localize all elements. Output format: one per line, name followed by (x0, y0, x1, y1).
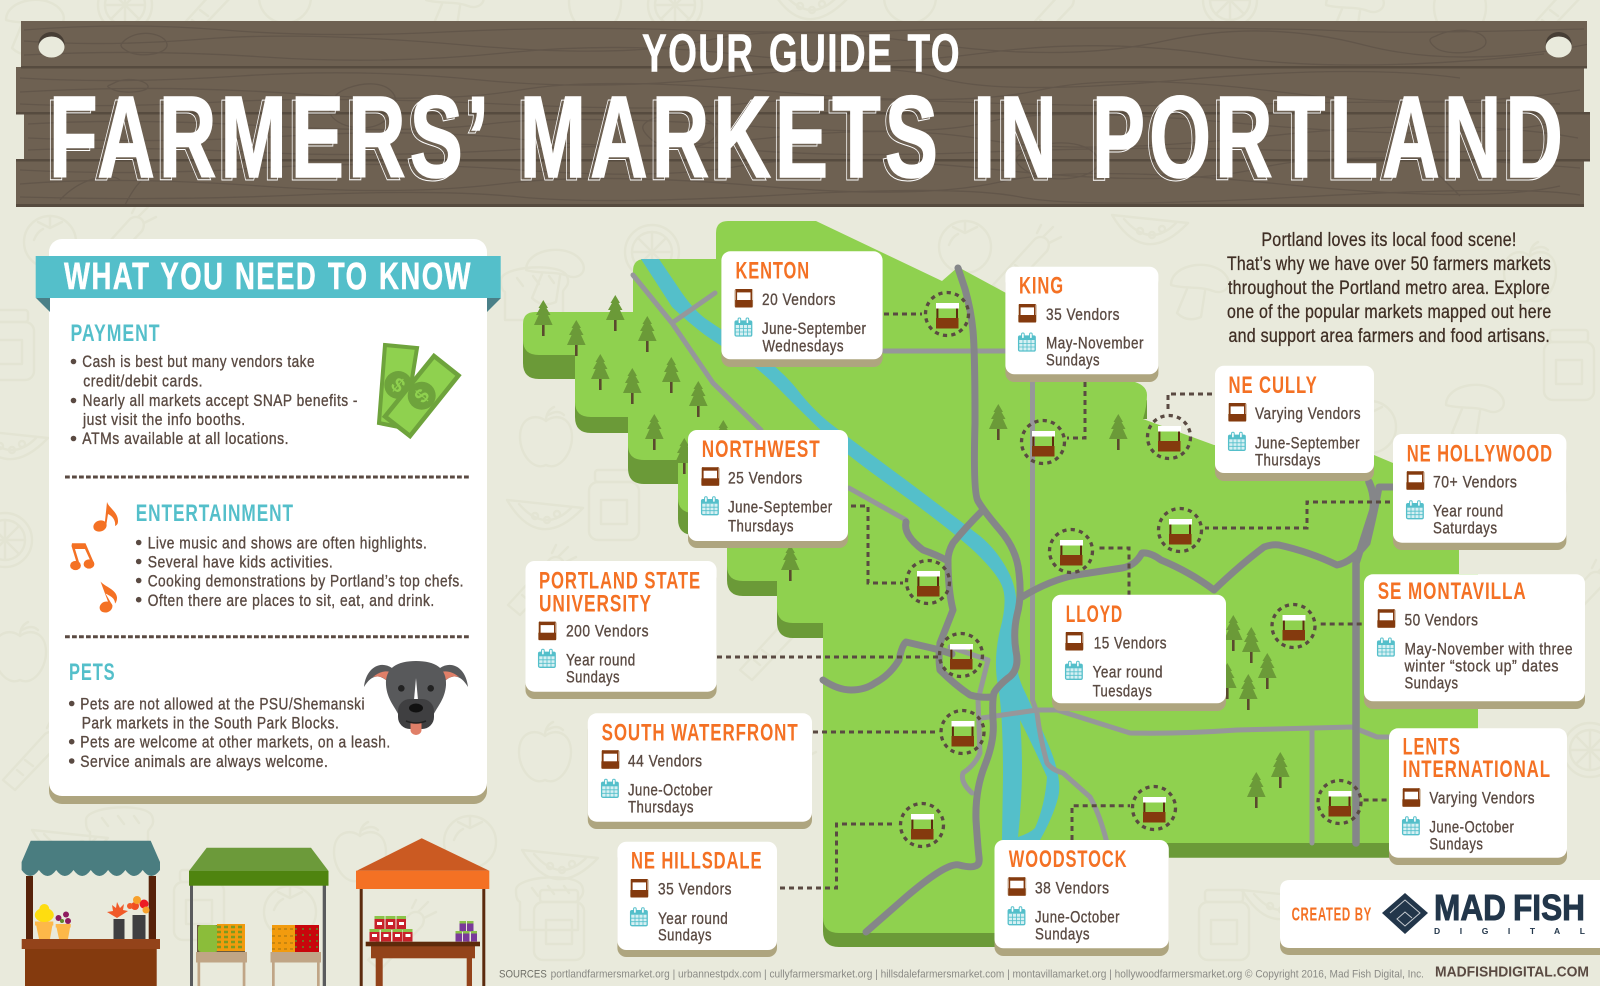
card: Lents International (1389, 728, 1567, 865)
payment bullets (71, 353, 358, 448)
vendor count (1065, 632, 1167, 652)
dotted connectors (717, 314, 1390, 888)
vendor count: Varying Vendors (1255, 404, 1361, 423)
card: Woodstock (994, 840, 1169, 956)
trees (534, 295, 1290, 808)
schedule: June-September (762, 319, 866, 338)
card: South Waterfront (588, 713, 812, 829)
schedule: Thursdays (1255, 450, 1321, 469)
market name: SOUTH WATERFRONT (602, 720, 799, 747)
vendor count: 200 Vendors (566, 622, 649, 641)
ribbon banner (36, 256, 501, 312)
schedule (539, 649, 636, 686)
schedule (1019, 333, 1144, 370)
schedule: Year round (566, 650, 636, 669)
pets bullets: Park markets in the South Park Blocks. (82, 715, 339, 733)
schedule: June-October (628, 780, 713, 799)
vendor count: 70+ Vendors (1433, 472, 1517, 491)
card: NE Cully (1215, 366, 1374, 481)
market name (539, 567, 701, 617)
map edge shadow (523, 330, 1392, 947)
section heading: pets: PETS (69, 659, 116, 686)
map land (523, 221, 1478, 933)
card: NE Hillsdale (617, 842, 777, 957)
vendor count: 50 Vendors (1404, 610, 1478, 629)
schedule: Sundays (1404, 673, 1458, 692)
flower pots (35, 896, 149, 939)
card: NE Hollywood (1393, 434, 1566, 550)
vendor count: 44 Vendors (628, 751, 702, 770)
wooden sign header (16, 21, 1600, 207)
market name: PORTLAND STATE (539, 567, 701, 594)
schedule (602, 779, 713, 816)
schedule: winter “stock up” dates (1404, 656, 1559, 675)
ribbon banner: WHAT YOU NEED TO KNOW (64, 256, 472, 298)
schedule (1008, 907, 1120, 943)
entertainment bullets: Several have kids activities. (148, 553, 333, 571)
card: Northwest (688, 430, 848, 548)
schedule: May-November (1046, 334, 1144, 353)
market stall: flowers (22, 841, 160, 986)
title: your guide to: YOUR GUIDE TO (642, 24, 961, 84)
website: MADFISHDIGITAL.COM (1435, 965, 1589, 981)
schedule: June-October (1035, 908, 1120, 927)
portland map (523, 221, 1478, 947)
schedule: Year round (1093, 662, 1163, 681)
market name: SE MONTAVILLA (1378, 578, 1527, 605)
section heading: payment: PAYMENT (70, 320, 160, 347)
schedule: Year round (658, 909, 728, 928)
payment bullets: ATMs available at all locations. (82, 430, 289, 448)
schedule (1407, 501, 1504, 537)
vendor count (1377, 609, 1478, 629)
card: Lloyd (1052, 595, 1226, 711)
produce crates (196, 924, 321, 986)
schedule: June-September (1255, 433, 1360, 452)
vendor count (1402, 788, 1535, 808)
jam jars (370, 916, 477, 942)
vendor count (630, 879, 732, 899)
schedule (735, 318, 866, 355)
vendor count: 35 Vendors (658, 880, 732, 899)
market pins (900, 292, 1361, 846)
schedule: Sundays (1035, 924, 1090, 943)
schedule: Thursdays (728, 517, 794, 536)
vendor count: 35 Vendors (1046, 305, 1120, 324)
vendor count (735, 289, 836, 309)
icon: logo mark (1382, 893, 1428, 934)
icon: money (379, 345, 458, 436)
schedule (631, 908, 728, 945)
card: SE Montavilla (1364, 574, 1585, 709)
credit card: created by Mad Fish Digital: CREATED BY (1292, 905, 1372, 925)
vendor count: 25 Vendors (728, 468, 803, 487)
vendor count: 20 Vendors (762, 290, 836, 309)
schedule: June-October (1429, 818, 1514, 837)
schedule: Sundays (1046, 351, 1100, 370)
vendor count (538, 622, 649, 641)
river island (1018, 720, 1047, 837)
schedule (1378, 638, 1573, 692)
schedule (1066, 661, 1163, 701)
schedule: Sundays (566, 667, 620, 686)
roads (633, 268, 1394, 932)
vendor count: 38 Vendors (1035, 878, 1110, 897)
market name: LENTS (1403, 733, 1461, 760)
market name: NE CULLY (1228, 372, 1318, 399)
vendor count: 15 Vendors (1094, 633, 1167, 652)
river (641, 259, 1059, 840)
market name: KENTON (736, 257, 810, 284)
hanging hole left (38, 32, 64, 58)
hanging hole right (1546, 32, 1572, 58)
payment bullets: credit/debit cards. (83, 372, 203, 390)
vendor count (1406, 471, 1517, 491)
credit card: created by Mad Fish Digital (1280, 880, 1600, 955)
vendor count (1008, 877, 1110, 897)
pets bullets: Pets are welcome at other markets, on a leash. (80, 734, 391, 752)
market name (1403, 733, 1551, 783)
market name: WOODSTOCK (1009, 846, 1127, 873)
icon: music notes (70, 502, 118, 614)
icon: dog (364, 661, 468, 735)
card: Kenton (721, 251, 883, 367)
market name: NORTHWEST (702, 436, 821, 463)
market name: NE HILLSDALE (631, 848, 762, 875)
vendor count (1228, 403, 1361, 423)
icon: money: $ (386, 374, 409, 398)
schedule: Sundays (658, 926, 712, 945)
credit card: created by Mad Fish Digital: DIGITAL (1434, 926, 1585, 936)
schedule: Tuesdays (1093, 682, 1152, 701)
card: King (1005, 267, 1158, 382)
intro text (1227, 229, 1552, 347)
vendor count (601, 750, 702, 770)
vendor count: Varying Vendors (1429, 789, 1535, 808)
schedule (702, 497, 833, 536)
panel: what you need to know (36, 239, 501, 804)
vendor count (1018, 304, 1120, 324)
sources footer: portlandfarmersmarket.org | urbannestpdx.com | cullyfarmersmarket.org | hillsdalefarmersmarket.com | montavillamarket.org | hollywoodfarmersmarket.org © Copyright 2016, Mad Fish Digital, Inc. (551, 968, 1424, 980)
pets bullets: Pets are not allowed at the PSU/Shemanski (80, 695, 365, 713)
schedule: Year round (1433, 501, 1504, 520)
market name: KING (1019, 273, 1064, 300)
entertainment bullets: Often there are places to sit, eat, and drink. (148, 592, 435, 610)
vendor count (701, 467, 803, 487)
payment bullets: Cash is best but many vendors take (82, 353, 315, 371)
market name: UNIVERSITY (539, 590, 652, 617)
market stall: preserves (356, 838, 489, 986)
payment bullets: Nearly all markets accept SNAP benefits - (83, 392, 358, 410)
entertainment bullets: Live music and shows are often highlights. (148, 534, 427, 552)
schedule (1403, 817, 1514, 853)
schedule: Saturdays (1433, 518, 1498, 537)
intro text: Portland loves its local food scene! (1261, 229, 1517, 251)
sources footer: SOURCES (499, 968, 547, 980)
icon: money: $ (410, 385, 434, 408)
schedule: Wednesdays (762, 336, 844, 355)
entertainment bullets (136, 534, 464, 610)
schedule: June-September (728, 498, 833, 517)
payment bullets: just visit the info booths. (82, 411, 246, 429)
card: Portland State University (526, 561, 717, 699)
market stall: produce (189, 848, 328, 986)
schedule: Sundays (1429, 834, 1483, 853)
pets bullets (69, 695, 391, 771)
pets bullets: Service animals are always welcome. (80, 753, 328, 771)
schedule (1229, 432, 1360, 469)
entertainment bullets: Cooking demonstrations by Portland’s top chefs. (148, 573, 464, 591)
market name: LLOYD (1066, 601, 1123, 628)
schedule: Thursdays (628, 797, 694, 816)
section heading: entertainment: ENTERTAINMENT (136, 500, 294, 527)
